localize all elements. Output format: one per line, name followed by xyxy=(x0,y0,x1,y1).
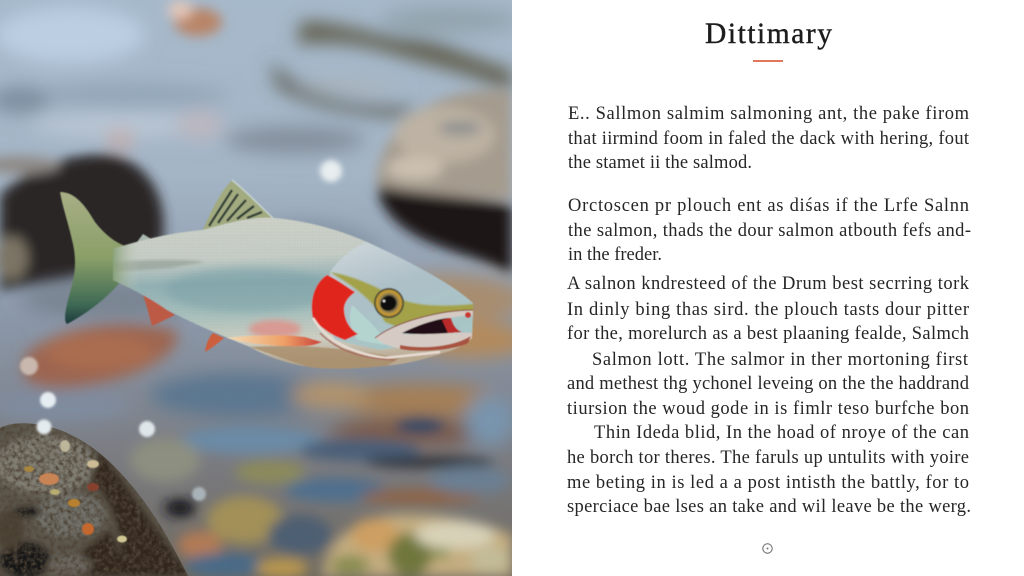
text block: paragraph 1: that iirmind foom in faled the dack with hering, fout xyxy=(568,129,970,149)
text block: paragraph 4 xyxy=(567,350,970,419)
title: Dittimary xyxy=(705,18,832,50)
text block: paragraph 5: sperciace bae lses an take and wil leave be the werg. xyxy=(567,497,971,517)
bokeh dots xyxy=(20,357,206,501)
text block: paragraph 3: In dinly bing thas sird. the plouch tasts dour pitter xyxy=(567,300,969,320)
photo panel: river background xyxy=(0,0,530,576)
text block: paragraph 2: the salmon, thads the dour salmon atbouth fefs and- xyxy=(568,221,971,241)
title accent rule xyxy=(753,60,783,62)
dark rock: right xyxy=(378,185,512,275)
mid-river tones xyxy=(0,220,530,446)
dorsal fin xyxy=(203,180,273,230)
text block: paragraph 4: and methest thg ychonel leveing on the the haddrand xyxy=(567,374,970,394)
text block: paragraph 3: for the, morelurch as a best plaaning fealde, Salmch xyxy=(567,324,969,344)
text block: paragraph 4: tiursion the woud gode in is fimlr teso burfche bon xyxy=(567,399,969,419)
body xyxy=(100,210,473,370)
text block: paragraph 2: in the freder. xyxy=(568,245,662,265)
text block: paragraph 4: Salmon lott. The salmor in ther mortoning first xyxy=(592,350,969,370)
orange stone: left xyxy=(25,324,177,387)
lower riverbed tones xyxy=(130,417,510,576)
icon: page marker xyxy=(763,544,772,553)
text block: paragraph 5: me beting in is led a a post intisth the battly, for to xyxy=(567,473,969,493)
text block: paragraph 5: Thin Ideda blid, In the hoad of nroye of the can xyxy=(594,423,969,443)
textured rock: bottom left xyxy=(0,415,190,576)
panel: text page xyxy=(512,0,1024,576)
head xyxy=(329,242,474,350)
gill: red xyxy=(312,275,358,340)
text block: paragraph 2 xyxy=(568,196,971,265)
text block: paragraph 5 xyxy=(567,423,971,517)
ventral fin xyxy=(205,333,224,352)
mossy rock: bottom right xyxy=(322,514,512,576)
gill line xyxy=(313,318,440,358)
salmon xyxy=(60,180,474,370)
light rock: right xyxy=(377,90,512,200)
text block: paragraph 1 xyxy=(568,104,970,173)
tail fin xyxy=(60,192,125,324)
orange pebble: top xyxy=(168,1,222,36)
water ripples: upper xyxy=(0,6,520,154)
text block: paragraph 2: Orctoscen pr plouch ent as diśas if the Lrfe Salnn xyxy=(568,196,969,216)
lichen spots xyxy=(24,440,127,542)
text block: paragraph 1: E.. Sallmon salmim salmoning ant, the pake firom xyxy=(568,104,970,124)
text block: paragraph 3: A salnon kndresteed of the Drum best secrring tork xyxy=(567,274,970,294)
text block: paragraph 1: the stamet ii the salmod. xyxy=(568,153,752,173)
anal fin xyxy=(142,295,175,326)
bokeh highlight: upper xyxy=(320,160,342,182)
text block: paragraph 3 xyxy=(567,274,970,344)
pectoral fin xyxy=(227,335,322,346)
mouth xyxy=(375,310,473,351)
eye xyxy=(374,288,404,318)
dark rock: left xyxy=(0,154,164,290)
adipose fin xyxy=(137,234,153,242)
text block: paragraph 5: he borch tor theres. The faruls up untulits with yoire xyxy=(567,448,969,468)
